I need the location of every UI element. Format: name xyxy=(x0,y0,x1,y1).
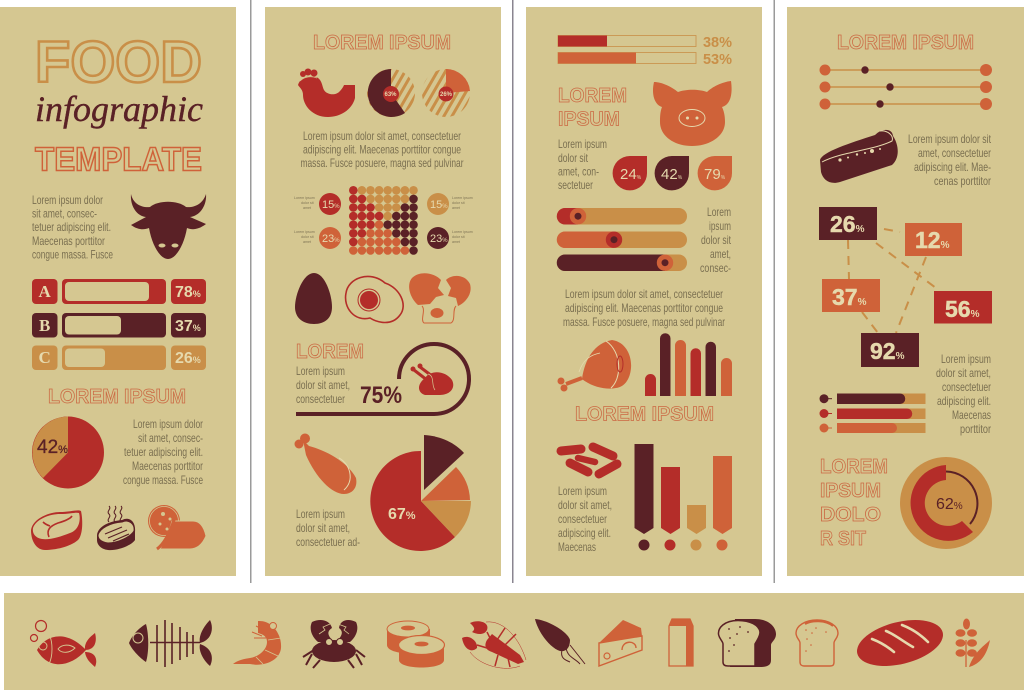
icon: grilled meat xyxy=(97,506,135,550)
stat box: 92%: 92% xyxy=(870,338,905,364)
icon: bread dark xyxy=(718,619,776,667)
donut chart: 63% xyxy=(367,69,415,117)
heading: Lorem Ipsum stacked: IPSUM xyxy=(558,108,620,130)
text block: pie description: Lorem ipsum xyxy=(296,507,345,521)
bar: A 78%: 78% xyxy=(175,284,201,301)
title: FOOD: FOOD xyxy=(35,30,202,95)
text block: pie description: sit amet, consec- xyxy=(138,431,203,445)
heading: Lorem Ipsum Dolor Sit stacked xyxy=(820,455,888,550)
heading: Lorem Ipsum: LOREM IPSUM xyxy=(313,31,451,54)
icon: cheese xyxy=(599,620,642,666)
donut chart: 26% xyxy=(422,69,470,117)
text block: sausage description xyxy=(558,484,612,554)
pie chart: 42%: 42% xyxy=(37,437,68,458)
icon: crab xyxy=(303,620,365,668)
text block: lorem: Lorem ipsum xyxy=(296,364,345,378)
legend: 15% tan: amet xyxy=(452,206,460,210)
drop: 42%: 42% xyxy=(661,166,683,183)
text block: sausage description: Maecenas xyxy=(558,540,596,554)
stat box: 26%: 26% xyxy=(830,211,865,237)
bar: B 37% xyxy=(32,313,206,338)
text block: flow description: consectetuer xyxy=(942,380,991,394)
heading: Lorem: LOREM xyxy=(296,340,364,363)
text block: slider description: ipsum xyxy=(709,219,731,233)
text block: flow description: dolor sit amet, xyxy=(936,366,991,380)
text block: centered paragraph xyxy=(563,287,725,329)
text block: flow description xyxy=(936,352,991,436)
heading: Lorem Ipsum stacked: LOREM xyxy=(558,84,627,107)
legend: 23% maroon: 23% xyxy=(430,233,448,245)
progress bar: 38%: 38% xyxy=(703,34,732,51)
legend: 23% maroon: amet xyxy=(452,240,460,244)
icon: roast chicken xyxy=(410,364,453,395)
drop: 24%: 24% xyxy=(620,166,642,183)
heading: Lorem Ipsum Dolor Sit stacked: LOREM xyxy=(820,455,888,478)
panel: pork and sausage xyxy=(526,7,762,576)
icon: steak xyxy=(31,510,82,550)
icon: sausages xyxy=(561,447,617,474)
text block: intro: congue massa. Fusce xyxy=(32,248,113,262)
legend: 15% red xyxy=(294,193,341,215)
legend: 15% red: Lorem ipsum xyxy=(294,196,315,200)
icon: loaf xyxy=(852,612,948,674)
text block: flow description: porttitor xyxy=(960,422,991,436)
heading: Lorem Ipsum Dolor Sit stacked: DOLO xyxy=(820,503,881,526)
text block: sausage description: dolor sit amet, xyxy=(558,498,612,512)
text block: chicken description xyxy=(300,129,464,170)
text block: intro xyxy=(32,193,113,262)
bar: C 26% xyxy=(32,346,206,370)
icon: pig head xyxy=(653,81,732,146)
text block: flow description: Maecenas xyxy=(952,408,991,422)
text block: pie description xyxy=(123,417,203,487)
title: infographic: infographic xyxy=(35,89,203,129)
text block: pie description: congue massa. Fusce xyxy=(123,473,203,487)
donut chart: 26%: 26% xyxy=(440,92,453,98)
legend: 15% tan: 15% xyxy=(430,199,448,211)
legend: 23% orange: 23% xyxy=(322,233,340,245)
text block: intro: Lorem ipsum dolor xyxy=(32,193,103,207)
text block: flow description: adipiscing elit. xyxy=(937,394,991,408)
icon: squid xyxy=(535,619,585,664)
legend: 23% maroon: Lorem ipsum xyxy=(452,230,473,234)
gauge: 75% arc: 75% xyxy=(360,382,402,409)
icon: lobster xyxy=(462,621,526,668)
text block: pig description: amet, con- xyxy=(558,164,599,178)
stat box: 12% xyxy=(905,223,962,256)
text block: centered paragraph: adipiscing elit. Maecenas porttitor congue xyxy=(565,301,723,315)
donut chart: 63%: 63% xyxy=(384,92,397,98)
text block: slider description: consec- xyxy=(700,261,731,275)
drop: 79% xyxy=(698,156,732,190)
text block: pie description: dolor sit amet, xyxy=(296,521,350,535)
legend: 23% maroon: dolor sit xyxy=(452,235,465,239)
text block: pie description: Lorem ipsum dolor xyxy=(133,417,203,431)
bar: B 37%: 37% xyxy=(175,318,201,335)
progress bar: 53%: 53% xyxy=(703,51,732,68)
legend: 15% tan: Lorem ipsum xyxy=(452,196,473,200)
icon: egg xyxy=(295,273,332,324)
dot matrix chart xyxy=(349,186,418,255)
legend: 15% tan xyxy=(427,193,473,215)
text block: hot dog description: cenas porttitor xyxy=(934,174,991,188)
bar: A 78%: A xyxy=(39,282,52,301)
panel: food icon strip xyxy=(4,593,1024,690)
text block: pig description: sectetuer xyxy=(558,178,593,192)
text block: hot dog description: Lorem ipsum dolor sit xyxy=(908,132,991,146)
icon: toast xyxy=(796,620,838,666)
title: TEMPLATE: TEMPLATE xyxy=(35,140,202,178)
heading: Lorem Ipsum Dolor Sit stacked: R SIT xyxy=(820,527,866,550)
progress bar: 53% xyxy=(558,51,732,68)
legend: 15% red: 15% xyxy=(322,199,340,211)
heading: Lorem Ipsum Dolor Sit stacked: IPSUM xyxy=(820,479,881,502)
stat box: 26% xyxy=(819,207,877,240)
text block: sausage description: adipiscing elit. xyxy=(558,526,611,540)
text block: hot dog description xyxy=(908,132,991,188)
text block: hot dog description: amet, consectetuer xyxy=(918,146,991,160)
slider chart xyxy=(557,208,687,271)
drop: 79%: 79% xyxy=(704,166,726,183)
donut chart: 62%: 62% xyxy=(936,496,963,513)
legend: 23% orange: dolor sit xyxy=(301,235,314,239)
stat box: 56% xyxy=(934,291,992,324)
text block: hot dog description: adipiscing elit. Mae- xyxy=(914,160,991,174)
text block: intro: tetuer adipiscing elit. xyxy=(32,220,111,234)
text block: pig description xyxy=(558,137,607,192)
icon: milk carton xyxy=(669,619,693,666)
stat box: 12%: 12% xyxy=(915,227,950,253)
text block: intro: Maecenas porttitor xyxy=(32,234,105,248)
pie chart: 42% xyxy=(32,416,104,488)
text block: slider description xyxy=(700,205,731,275)
text block: centered paragraph: Lorem ipsum dolor sit amet, consectetuer xyxy=(565,287,723,301)
heading: Lorem Ipsum stacked xyxy=(558,84,627,130)
horizontal bars with pins xyxy=(820,394,926,433)
icon: fried egg xyxy=(346,276,403,322)
text block: lorem xyxy=(296,364,350,406)
text block: pie description: Maecenas porttitor xyxy=(132,459,203,473)
heading: Lorem Ipsum: LOREM IPSUM xyxy=(575,402,714,426)
dashed connectors xyxy=(848,229,936,333)
legend: 23% orange: Lorem ipsum xyxy=(294,230,315,234)
text block: pig description: Lorem ipsum xyxy=(558,137,607,151)
icon: cow head xyxy=(131,194,206,259)
bar: B 37%: B xyxy=(39,316,50,335)
text block: chicken description: Lorem ipsum dolor sit amet, consectetuer xyxy=(303,129,461,143)
progress bar: 38% xyxy=(558,34,732,51)
column chart: rounded xyxy=(645,333,732,396)
legend: 23% maroon xyxy=(427,227,473,249)
text block: chicken description: massa. Fusce posuere, magna sed pulvinar xyxy=(300,156,464,170)
donut chart: 62% xyxy=(900,457,992,549)
panel: poultry and eggs xyxy=(265,7,501,576)
slider lines xyxy=(820,64,992,110)
icon: fish skeleton xyxy=(129,620,212,667)
icon: wheat xyxy=(956,618,990,667)
text block: lorem: consectetuer xyxy=(296,392,345,406)
drop: 42% xyxy=(655,156,689,190)
heading: Lorem Ipsum: LOREM IPSUM xyxy=(48,385,186,408)
icon: hot dog xyxy=(820,130,898,183)
icon: fish xyxy=(30,620,96,667)
text block: slider description: Lorem xyxy=(707,205,731,219)
legend: 15% red: dolor sit xyxy=(301,201,314,205)
icon: sushi rolls xyxy=(387,621,444,668)
legend: 15% red: amet xyxy=(303,206,311,210)
drop: 24% xyxy=(613,156,647,190)
text block: sausage description: Lorem ipsum xyxy=(558,484,607,498)
icon: broken egg xyxy=(409,273,471,323)
icon: salami xyxy=(148,505,206,549)
icon: ham xyxy=(558,340,631,392)
text block: chicken description: adipiscing elit. Maecenas porttitor congue xyxy=(303,142,461,156)
pie chart: 67% xyxy=(370,435,471,551)
bar: A 78% xyxy=(32,279,206,304)
text block: sausage description: consectetuer xyxy=(558,512,607,526)
text block: lorem: dolor sit amet, xyxy=(296,378,350,392)
heading: Lorem Ipsum: LOREM IPSUM xyxy=(837,31,974,54)
icon: shrimp xyxy=(233,621,281,665)
text block: pie description: consectetuer ad- xyxy=(296,535,360,549)
legend: 23% orange: amet xyxy=(303,240,311,244)
legend: 23% orange xyxy=(294,227,341,249)
arrow bar chart xyxy=(634,444,732,550)
gauge: 75% arc xyxy=(296,344,469,414)
text block: intro: sit amet, consec- xyxy=(32,206,97,220)
text block: pig description: dolor sit xyxy=(558,151,588,165)
text block: flow description: Lorem ipsum xyxy=(941,352,991,366)
stat box: 37%: 37% xyxy=(832,284,867,310)
stat box: 37% xyxy=(822,279,880,312)
stat box: 56%: 56% xyxy=(945,296,980,322)
legend: 15% tan: dolor sit xyxy=(452,201,465,205)
pie chart: 67%: 67% xyxy=(388,506,416,523)
icon: chicken leg xyxy=(294,434,356,494)
stat box: 92% xyxy=(861,333,919,367)
panel: hot dog and flow xyxy=(787,7,1024,576)
text block: slider description: amet, xyxy=(710,247,731,261)
bar: C 26%: 26% xyxy=(175,350,201,367)
bar: C 26%: C xyxy=(39,348,51,367)
text block: pie description: tetuer adipiscing elit. xyxy=(124,445,203,459)
text block: centered paragraph: massa. Fusce posuere, magna sed pulvinar xyxy=(563,315,725,329)
text block: slider description: dolor sit xyxy=(701,233,731,247)
icon: chicken xyxy=(298,68,355,117)
panel: food title and cow statistics xyxy=(0,7,236,576)
text block: pie description xyxy=(296,507,360,549)
